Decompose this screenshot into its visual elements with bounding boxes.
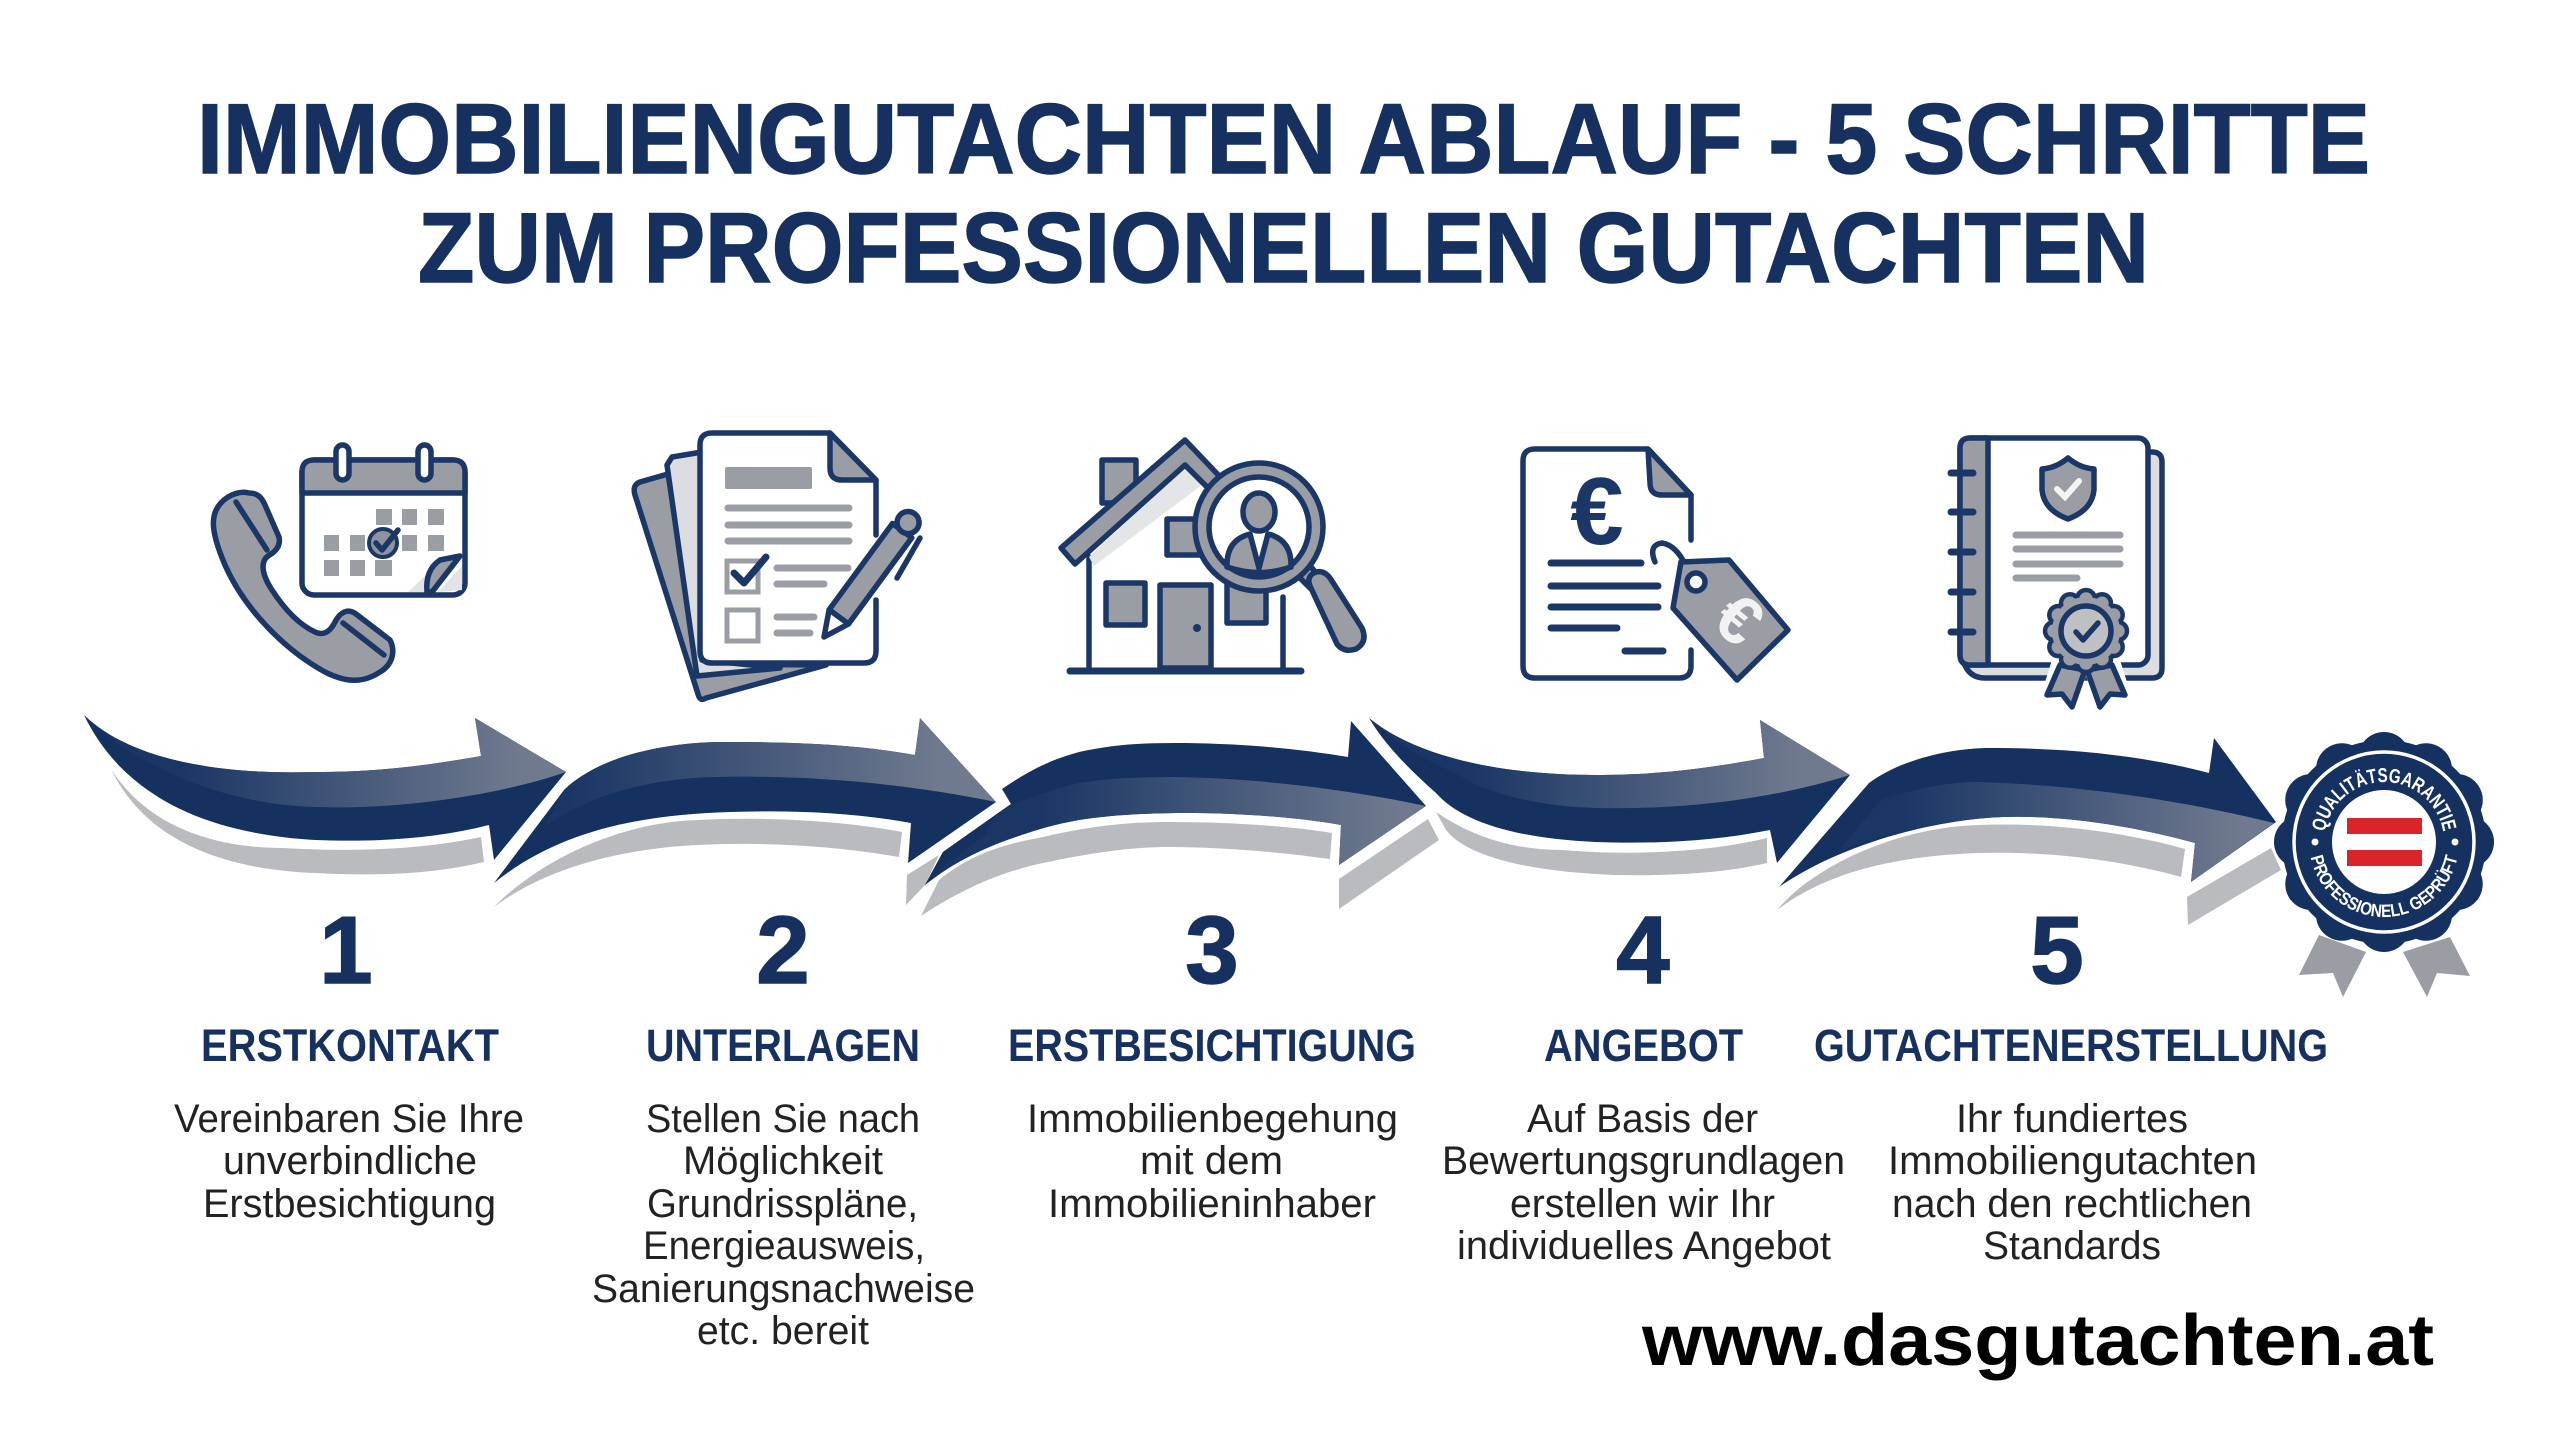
arrow 1	[84, 715, 566, 874]
description 2: Möglichkeit	[683, 1139, 883, 1183]
heading: Angebot: ANGEBOT	[1544, 1020, 1743, 1071]
badge ribbons	[2299, 935, 2470, 997]
description 2: Sanierungsnachweise	[592, 1267, 975, 1311]
number 1: 1	[319, 897, 373, 1004]
icon: offer document with price tag	[1523, 449, 1788, 680]
seal text	[2310, 768, 2457, 918]
description 4: Bewertungsgrundlagen	[1442, 1139, 1845, 1183]
description 2: Grundrisspläne,	[647, 1182, 918, 1226]
seal body	[2274, 732, 2494, 952]
title: IMMOBILIENGUTACHTEN ABLAUF - 5 SCHRITTE	[197, 83, 2370, 194]
description 2: Energieausweis,	[643, 1224, 925, 1268]
arrow 4	[1369, 718, 1850, 875]
panel: step 4	[1442, 449, 1845, 1268]
red and white flag bars	[2347, 818, 2422, 866]
heading: Erstbesichtigung: ERSTBESICHTIGUNG	[1008, 1020, 1416, 1071]
icon: phone and calendar	[213, 445, 465, 680]
description 1: Erstbesichtigung	[203, 1182, 496, 1226]
panel: step 3	[1008, 440, 1416, 1226]
description 4: erstellen wir Ihr	[1510, 1182, 1775, 1226]
description 4: Auf Basis der	[1527, 1097, 1758, 1141]
description 5	[1888, 1097, 2257, 1268]
heading: Gutachtenerstellung: GUTACHTENERSTELLUNG	[1814, 1020, 2328, 1071]
description 2: Stellen Sie nach	[646, 1097, 920, 1141]
number 3: 3	[1185, 897, 1239, 1004]
title: ZUM PROFESSIONELLEN GUTACHTEN	[418, 192, 2149, 303]
description 5: nach den rechtlichen	[1892, 1182, 2252, 1226]
description 5: Standards	[1983, 1224, 2161, 1268]
number 5: 5	[2030, 897, 2084, 1004]
arrow 5	[1777, 738, 2281, 925]
badge: quality guarantee seal	[2274, 732, 2494, 997]
description 4	[1442, 1097, 1845, 1268]
process arrows	[84, 715, 2281, 925]
description 3: mit dem	[1140, 1139, 1283, 1183]
icon: documents and pen	[634, 433, 924, 699]
icon: report with rosette	[1951, 438, 2162, 714]
heading: Unterlagen: UNTERLAGEN	[646, 1020, 920, 1071]
description 3: Immobilienbegehung	[1027, 1097, 1398, 1141]
description 3: Immobilieninhaber	[1048, 1182, 1376, 1226]
panel: step 2	[592, 433, 975, 1353]
description 1	[174, 1097, 524, 1226]
description 3	[1027, 1097, 1398, 1226]
seal text: QUALITÄTSGARANTIE	[2312, 768, 2456, 832]
number 4: 4	[1616, 897, 1670, 1004]
number 2: 2	[756, 897, 810, 1004]
euro symbol: €	[1570, 458, 1624, 565]
seal text: PROFESSIONELL GEPRÜFT	[2310, 854, 2457, 918]
website url: www.dasgutachten.at	[1641, 1301, 2434, 1381]
icon: house with magnifier	[1061, 440, 1364, 671]
heading: Erstkontakt: ERSTKONTAKT	[201, 1020, 499, 1071]
description 2: etc. bereit	[697, 1309, 869, 1353]
description 5: Ihr fundiertes	[1956, 1097, 2188, 1141]
description 4: individuelles Angebot	[1457, 1224, 1831, 1268]
title	[197, 83, 2370, 303]
arrow 2	[494, 718, 996, 907]
panel: step 5	[1814, 438, 2328, 1268]
icon: offer document with price tag: €	[1700, 578, 1778, 661]
description 1: Vereinbaren Sie Ihre	[174, 1097, 524, 1141]
panel: step 1	[174, 445, 524, 1226]
description 5: Immobiliengutachten	[1888, 1139, 2257, 1183]
description 1: unverbindliche	[223, 1139, 477, 1183]
description 2	[592, 1097, 975, 1353]
arrow 3	[921, 721, 1439, 916]
